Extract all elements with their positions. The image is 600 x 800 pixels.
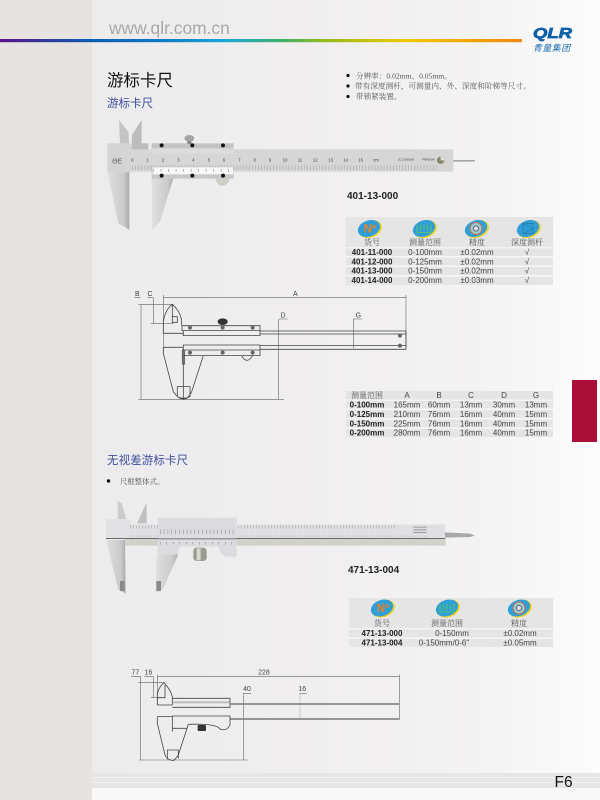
- title: 游标卡尺: [107, 71, 173, 90]
- caliper photo 401-13-000: 14: [343, 157, 349, 162]
- caliper photo 401-13-000: 11: [298, 157, 303, 162]
- dimension drawing 401 series: B: [135, 291, 140, 298]
- row 0-125mm: 76mm: [428, 410, 450, 419]
- icon: measuring range: [433, 596, 462, 621]
- row 401-12-000: 401-12-000: [352, 257, 393, 266]
- feature bullet list: 带锁紧装置。: [356, 91, 402, 101]
- icon: depth rod: [514, 217, 543, 241]
- row 401-14-000: [352, 276, 530, 285]
- row 471-13-004: 0-150mm/0-6": [419, 638, 469, 648]
- caliper photo 401-13-000: [107, 120, 475, 230]
- rainbow header line: [0, 39, 522, 42]
- spec table 401 series: 货号: [364, 237, 380, 247]
- row 0-100mm: 13mm: [525, 400, 547, 410]
- part number 401-13-000: 401-13-000: [347, 191, 399, 202]
- row 471-13-004: ±0.05mm: [503, 638, 537, 648]
- row 0-150mm: 225mm: [394, 419, 421, 428]
- row 401-13-000: 401-13-000: [352, 267, 393, 276]
- row 0-125mm: 15mm: [525, 410, 547, 419]
- caliper photo 401-13-000: 5: [208, 157, 211, 162]
- caliper photo 401-13-000: 8: [253, 157, 256, 162]
- table header: [374, 618, 527, 628]
- table header: C: [468, 391, 474, 400]
- table header: 货号: [374, 618, 390, 628]
- caliper photo 401-13-000: cm: [373, 157, 379, 162]
- feature bullet list: 带有深度测杆，可测量内、外、深度和阶梯等尺寸。: [355, 80, 531, 92]
- row 401-12-000: 0-125mm: [408, 257, 442, 266]
- table header: 测量范围: [431, 618, 463, 628]
- row 0-100mm: 60mm: [428, 400, 450, 410]
- table header: D: [501, 391, 507, 400]
- part number 471-13-004: 471-13-004: [348, 565, 400, 576]
- row 471-13-000: [362, 629, 537, 638]
- row 0-150mm: 15mm: [525, 419, 547, 428]
- row 0-200mm: 15mm: [525, 429, 547, 438]
- dimension drawing 401 series: G: [356, 312, 361, 319]
- table header: B: [436, 391, 442, 400]
- row 471-13-004: 471-13-004: [362, 638, 403, 648]
- row 0-200mm: 280mm: [394, 429, 421, 438]
- table header: [351, 390, 539, 400]
- row 0-150mm: 76mm: [428, 419, 450, 428]
- dimension table: [346, 390, 553, 438]
- subtitle: no-parallax caliper: 无视差游标卡尺: [107, 453, 188, 467]
- table header: 测量范围: [351, 390, 383, 400]
- feature bullet list: 分辨率：0.02mm、0.05mm。: [356, 70, 452, 80]
- spec table 401 series: [346, 217, 553, 285]
- row 471-13-000: 0-150mm: [435, 629, 469, 638]
- icon: part number: [355, 217, 384, 241]
- caliper photo 401-13-000: 4: [192, 157, 195, 162]
- row 0-125mm: [350, 410, 547, 419]
- feature bullet list: [346, 70, 531, 101]
- spec table 401 series: 精度: [469, 237, 485, 247]
- caliper photo 401-13-000: 13: [328, 157, 334, 162]
- row 0-100mm: [350, 400, 547, 410]
- row 401-14-000: ±0.03mm: [460, 276, 494, 285]
- caliper photo 471-13-004: [106, 501, 475, 593]
- caliper photo 401-13-000: 10: [283, 157, 288, 162]
- dimension drawing 401 series: A: [293, 291, 298, 298]
- icon: part number: Nº: [364, 224, 376, 236]
- row 401-12-000: ±0.02mm: [460, 257, 494, 266]
- caliper photo 401-13-000: 12: [313, 157, 318, 162]
- dimension drawing 471 series: 228: [258, 669, 270, 676]
- row 401-14-000: 401-14-000: [352, 276, 393, 285]
- spec table 471 series: [349, 596, 553, 648]
- table header: 精度: [511, 618, 527, 628]
- dimension drawing 471 series: 16: [144, 670, 152, 677]
- row 0-100mm: 0-100mm: [350, 400, 384, 410]
- dimension drawing 471 series: 77: [131, 670, 139, 677]
- row 0-150mm: 0-150mm: [350, 419, 384, 428]
- bullet: integral frame: 尺框整体式。: [120, 477, 164, 486]
- dimension drawing 401 series: [134, 291, 406, 399]
- caliper photo 401-13-000: 7: [238, 157, 241, 162]
- row 0-200mm: 0-200mm: [350, 429, 384, 438]
- row 0-150mm: 40mm: [493, 419, 515, 428]
- logo: QLR: QLR: [533, 25, 572, 42]
- row 401-11-000: 401-11-000: [352, 248, 393, 257]
- dimension drawing 471 series: 40: [243, 686, 251, 693]
- row 0-200mm: [350, 429, 547, 438]
- row 401-11-000: √: [525, 248, 530, 257]
- caliper photo 401-13-000: ZC 10000000: [398, 157, 415, 161]
- icon: accuracy: [462, 217, 491, 241]
- row 0-150mm: 16mm: [460, 419, 482, 428]
- caliper photo 401-13-000: ƏE: [112, 157, 123, 166]
- caliper photo 401-13-000: 6: [223, 157, 226, 162]
- website url: www.qlr.com.cn: [108, 18, 230, 38]
- row 401-12-000: [352, 257, 530, 266]
- row 0-150mm: [350, 419, 547, 428]
- row 401-12-000: √: [525, 257, 530, 266]
- row 401-14-000: √: [525, 276, 530, 285]
- row 0-200mm: 40mm: [493, 429, 515, 438]
- row 0-100mm: 165mm: [394, 400, 421, 410]
- dimension drawing 401 series: D: [280, 312, 286, 319]
- spec table 401 series: 深度测杆: [511, 237, 543, 247]
- row 0-200mm: 76mm: [428, 429, 450, 438]
- red section tab: [572, 380, 597, 442]
- icon: accuracy: [505, 596, 534, 621]
- logo: QLR: [533, 25, 572, 53]
- table header: A: [404, 391, 410, 400]
- row 401-11-000: 0-100mm: [408, 248, 442, 257]
- row 401-11-000: ±0.02mm: [460, 248, 494, 257]
- row 401-14-000: 0-200mm: [408, 276, 442, 285]
- row 471-13-000: ±0.02mm: [503, 629, 537, 638]
- row 0-125mm: 40mm: [493, 410, 515, 419]
- row 0-125mm: 210mm: [394, 410, 421, 419]
- caliper photo 401-13-000: 1: [146, 157, 149, 162]
- caliper photo 401-13-000: 2: [162, 157, 165, 162]
- caliper photo 401-13-000: 9: [269, 157, 272, 162]
- dimension drawing 471 series: 16: [298, 686, 306, 693]
- row 401-13-000: 0-150mm: [408, 267, 442, 276]
- row 0-100mm: 30mm: [493, 400, 515, 410]
- row 401-13-000: ±0.02mm: [460, 267, 494, 276]
- icon: measuring range: [410, 217, 439, 241]
- icon: part number: [368, 596, 397, 621]
- row 471-13-000: 471-13-000: [362, 629, 403, 638]
- row 0-100mm: 13mm: [460, 400, 482, 410]
- dimension drawing 471 series: [131, 669, 399, 761]
- caliper photo 401-13-000: 3: [177, 157, 180, 162]
- row 401-13-000: √: [525, 267, 530, 276]
- row 0-125mm: 0-125mm: [350, 410, 384, 419]
- page number: F6: [554, 774, 573, 791]
- caliper photo 401-13-000: 15: [358, 157, 364, 162]
- dimension drawing 401 series: C: [147, 291, 153, 298]
- icon: part number: Nº: [377, 603, 389, 615]
- row 471-13-004: [362, 638, 537, 648]
- caliper photo 401-13-000: 0: [131, 157, 134, 162]
- row 401-13-000: [352, 267, 530, 276]
- row 401-11-000: [352, 248, 530, 257]
- spec table 401 series: 测量范围: [409, 237, 441, 247]
- logo: QLR: 青量集团: [533, 43, 571, 53]
- caliper photo 401-13-000: PRM000M: [422, 157, 435, 161]
- row 0-125mm: 16mm: [460, 410, 482, 419]
- table header: G: [533, 391, 539, 400]
- subtitle: vernier caliper: 游标卡尺: [107, 97, 154, 110]
- row 0-200mm: 16mm: [460, 429, 482, 438]
